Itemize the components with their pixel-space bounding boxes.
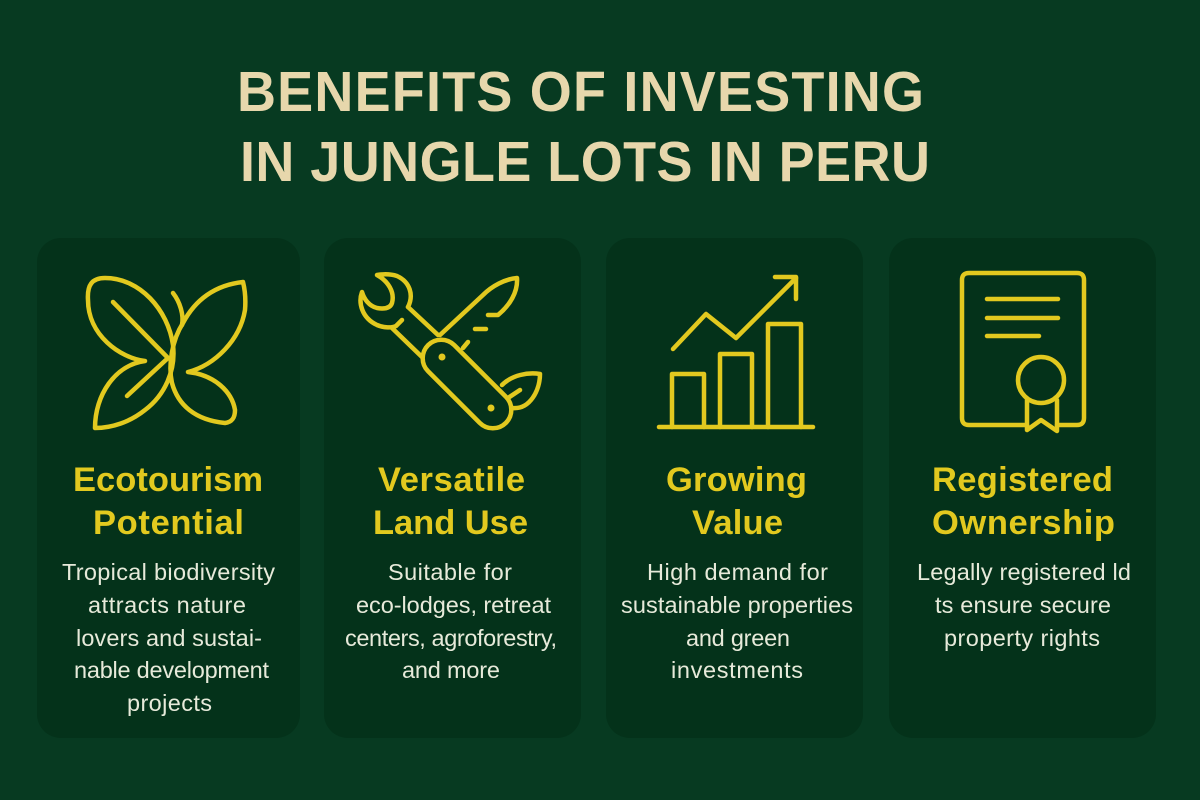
description xyxy=(345,559,557,683)
heading: Land Use xyxy=(373,504,528,542)
title: BENEFITS OF INVESTING xyxy=(237,60,924,123)
heading: Registered xyxy=(932,461,1113,499)
heading xyxy=(373,461,528,542)
description: attracts nature xyxy=(88,592,246,618)
heading xyxy=(73,461,263,542)
description: Legally registered ld xyxy=(917,559,1131,585)
description xyxy=(917,559,1131,651)
panel: registered ownership xyxy=(889,238,1156,738)
description: Suitable for xyxy=(388,559,512,585)
description: nable development xyxy=(74,657,269,683)
icon: certificate with seal xyxy=(962,273,1084,431)
title: IN JUNGLE LOTS IN PERU xyxy=(240,130,930,193)
description: investments xyxy=(671,657,803,683)
description: lovers and sustai- xyxy=(76,625,262,651)
heading xyxy=(666,461,807,542)
heading: Ecotourism xyxy=(73,461,263,499)
icon: multi-tool with wrench, blade and leaf xyxy=(361,274,540,436)
heading: Growing xyxy=(666,461,807,499)
description: and green xyxy=(686,625,790,651)
description: High demand for xyxy=(647,559,828,585)
panel: versatile land use xyxy=(324,238,581,738)
description: ts ensure secure xyxy=(935,592,1111,618)
heading: Versatile xyxy=(378,461,525,499)
description: projects xyxy=(127,690,212,716)
icon: butterfly with leaf wings xyxy=(88,278,245,428)
icon: rising bar chart with arrow xyxy=(659,277,813,427)
description xyxy=(621,559,853,683)
description: eco-lodges, retreat xyxy=(356,592,551,618)
panel: ecotourism potential xyxy=(37,238,300,738)
heading: Potential xyxy=(93,504,244,542)
description: centers, agroforestry, xyxy=(345,625,557,651)
description xyxy=(62,559,275,716)
description: property rights xyxy=(944,625,1100,651)
heading xyxy=(932,461,1115,542)
heading: Value xyxy=(692,504,783,542)
heading: Ownership xyxy=(932,504,1115,542)
title xyxy=(237,60,930,193)
panel: growing value xyxy=(606,238,863,738)
description: and more xyxy=(402,657,500,683)
description: Tropical biodiversity xyxy=(62,559,275,585)
description: sustainable properties xyxy=(621,592,853,618)
